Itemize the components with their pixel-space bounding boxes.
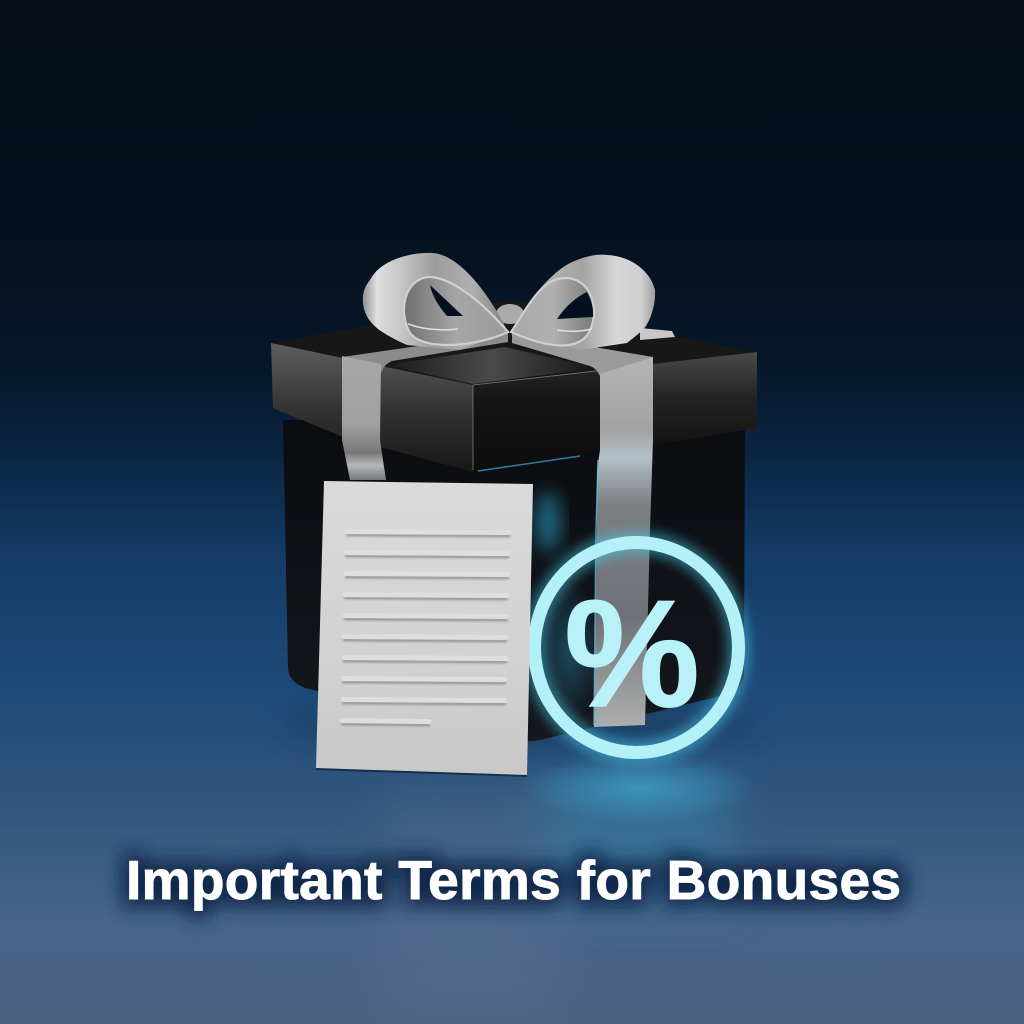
document shadow [316,768,527,777]
lid left face [271,343,473,472]
box body [283,420,745,741]
ribbon left vertical [342,356,386,480]
bow hole left [430,285,463,316]
bow back right loop [511,255,655,350]
bow inner highlights [408,324,592,331]
bow back left loop [363,253,508,350]
title text: Important Terms for Bonuses [126,849,901,911]
document sheet [316,481,533,775]
document text lines [342,532,509,725]
percent glyph: % [564,569,700,739]
ribbon right vertical [594,357,653,727]
cyan edge on right ribbon [594,460,598,725]
ribbon tail behind bow [640,328,675,340]
badge ring [534,542,738,752]
gift box [271,253,760,747]
document [316,481,533,777]
cyan reflection on box [535,492,561,552]
bow front right ring [511,278,594,345]
percent badge [534,542,738,752]
lid right face [473,370,600,472]
bow hole right [557,292,593,319]
ribbon on lid top [342,333,508,378]
bow centre knot [496,304,524,324]
lid top [271,300,757,385]
badge glow [534,542,738,752]
box shadow [280,703,760,747]
title shadow: Important Terms for Bonuses [126,849,901,911]
lid edge highlights [473,371,596,470]
bow front left ring [404,277,508,345]
title [126,849,901,911]
